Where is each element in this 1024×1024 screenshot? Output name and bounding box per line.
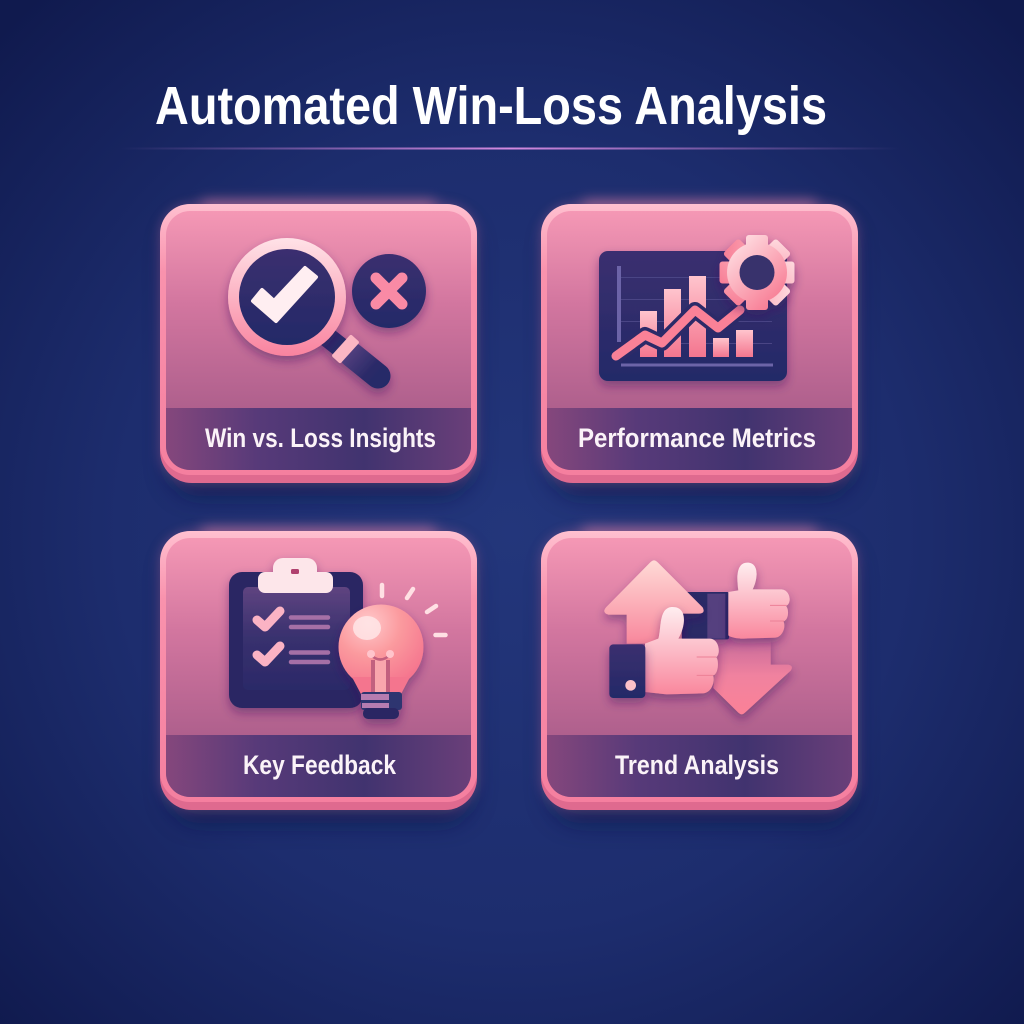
- icon: clipboard: [229, 558, 363, 708]
- label: Trend Analysis: Trend Analysis: [615, 750, 779, 780]
- label: Win vs. Loss Insights: Win vs. Loss Insights: [205, 423, 436, 453]
- icon: gear: [720, 235, 794, 310]
- title: Automated Win-Loss Analysis: [155, 76, 827, 136]
- label: Key Feedback: Key Feedback: [243, 750, 397, 780]
- icon: upper sleeve: [682, 592, 729, 639]
- icon: upper thumbs-up hand: [728, 563, 790, 639]
- icon: magnifying glass with check and cross: [228, 238, 426, 376]
- icon: cross badge: [352, 254, 426, 328]
- icon: up arrow: [604, 560, 704, 644]
- panel: Win vs. Loss Insights: [160, 201, 477, 496]
- icon: arrows and thumbs up: [604, 560, 792, 714]
- icon: magnifier lens: [228, 238, 346, 356]
- icon: lower sleeve: [609, 644, 645, 698]
- trend line: [616, 310, 740, 356]
- icon: down arrow: [713, 637, 792, 714]
- chart panel: [599, 251, 787, 381]
- icon: magnifier handle: [326, 334, 378, 376]
- icon: lower thumbs-up hand: [645, 607, 719, 694]
- icon: chart with gear: [599, 235, 794, 381]
- panel: Performance Metrics: [541, 201, 858, 496]
- panel: Trend Analysis: [541, 528, 858, 823]
- bar chart: [640, 276, 753, 357]
- label: Performance Metrics: Performance Metrics: [578, 423, 816, 453]
- panel: Key Feedback: [160, 528, 477, 823]
- icon: clipboard with light bulb: [229, 558, 446, 719]
- icon: light rays: [382, 585, 446, 635]
- icon: light bulb: [338, 604, 424, 719]
